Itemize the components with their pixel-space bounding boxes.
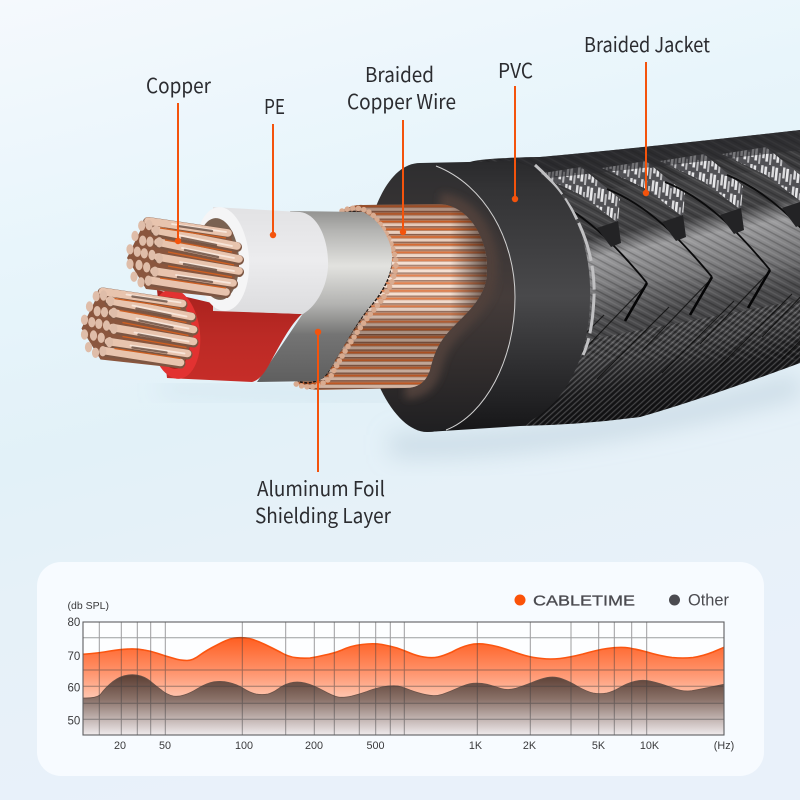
axis unit: db SPL: (db SPL)	[68, 600, 109, 612]
label: Aluminum Foil Shielding Layer: Aluminum Foil	[257, 472, 385, 502]
PVC sheath	[361, 161, 590, 432]
braided jacket	[470, 130, 800, 426]
x axis labels: 50	[159, 740, 171, 752]
braided copper wire	[290, 200, 490, 395]
aluminum foil shield	[257, 211, 392, 382]
label: Copper: Copper	[146, 69, 211, 99]
chart: frequency curves	[83, 622, 724, 735]
label: Copper	[146, 69, 211, 244]
legend	[514, 592, 729, 610]
legend: CABLETIME	[533, 592, 635, 610]
y axis labels: 80	[68, 617, 80, 629]
label: PE	[264, 90, 285, 238]
label: Aluminum Foil Shielding Layer	[255, 329, 391, 529]
x axis labels: 10K	[640, 740, 660, 752]
panel: frequency response	[37, 562, 764, 776]
label: Braided Copper Wire: Copper Wire	[347, 85, 456, 115]
lower copper strand bundle	[81, 290, 194, 368]
y axis labels: 60	[68, 682, 80, 694]
white PE core	[191, 205, 328, 314]
x axis labels: 2K	[523, 740, 537, 752]
x axis labels: 500	[366, 740, 385, 752]
red insulated core	[145, 287, 302, 382]
label: Braided Copper Wire: Braided	[365, 58, 434, 88]
legend: Other	[688, 592, 729, 610]
upper copper strand bundle	[126, 219, 240, 298]
y axis labels	[68, 617, 80, 728]
x axis labels: 1K	[469, 740, 483, 752]
cable cross-section illustration	[81, 120, 800, 445]
y axis labels: 50	[68, 716, 80, 728]
label: Aluminum Foil Shielding Layer: Shielding Layer	[255, 499, 391, 529]
label: PVC: PVC	[498, 54, 533, 84]
label: Braided Copper Wire	[347, 58, 456, 235]
x axis labels: 20	[114, 740, 126, 752]
label: Braided Jacket	[584, 28, 710, 196]
x axis labels	[114, 740, 734, 752]
y axis labels: 70	[68, 651, 80, 663]
label: PVC	[498, 54, 533, 202]
x axis labels: 5K	[592, 740, 606, 752]
label: PE: PE	[264, 90, 285, 120]
label: Braided Jacket: Braided Jacket	[584, 28, 710, 58]
x axis labels: 100	[235, 740, 253, 752]
x axis labels: (Hz)	[714, 740, 734, 752]
x axis labels: 200	[305, 740, 323, 752]
